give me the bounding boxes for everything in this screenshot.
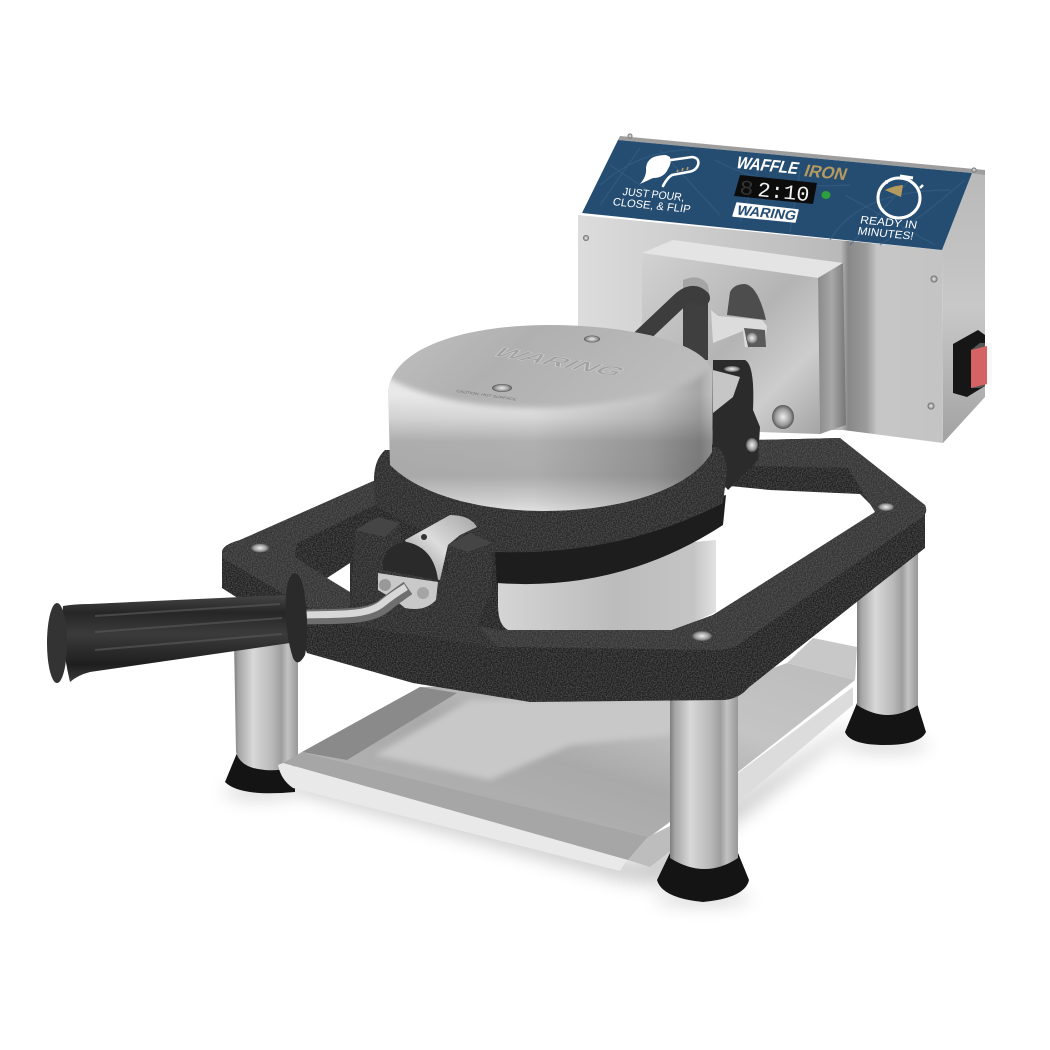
right post cap	[448, 533, 492, 552]
control box front face	[578, 215, 943, 443]
tray back rim	[787, 638, 857, 680]
left leg	[225, 640, 298, 793]
handle	[47, 573, 408, 683]
grip end cap	[47, 603, 67, 683]
tray interior	[302, 663, 855, 838]
rear hinge	[712, 360, 760, 490]
grip	[62, 595, 291, 682]
hinge boss	[350, 517, 505, 650]
frame screws	[251, 503, 894, 641]
tray front lip	[283, 752, 648, 860]
heading: waffle iron	[734, 153, 850, 184]
mount box	[640, 240, 846, 434]
mount box side face	[818, 263, 846, 434]
icon: stopwatch	[878, 176, 923, 218]
power cord	[640, 294, 702, 338]
tray side wall	[738, 687, 853, 802]
handle rod	[305, 587, 408, 617]
frame top surface right and front	[473, 438, 926, 650]
vertical hinge post	[683, 300, 708, 360]
pour caption: CLOSE, & FLIP	[612, 196, 692, 216]
product illustration: waffle iron	[47, 134, 987, 912]
ready caption	[857, 214, 918, 243]
mount box front face	[642, 253, 820, 434]
icon: pour batter into iron	[640, 155, 698, 186]
back right leg	[845, 540, 926, 745]
control box top edge	[618, 136, 985, 175]
digital timer display	[734, 175, 817, 208]
cord clip	[711, 284, 767, 347]
rocker power switch	[953, 330, 992, 397]
frame underside and side	[222, 438, 925, 702]
lower cooking body	[490, 540, 716, 632]
lid body	[380, 320, 720, 515]
control box right side face	[942, 172, 985, 443]
ready caption: READY IN	[859, 214, 918, 232]
status LED	[822, 191, 830, 199]
cast iron base frame	[222, 438, 926, 702]
drip tray	[278, 638, 857, 871]
heading: waffle iron: IRON	[802, 161, 850, 184]
digital timer display: 8	[738, 178, 755, 202]
ground shadows	[222, 720, 929, 904]
silver hinge barrel	[405, 515, 477, 580]
embossed logo: WARING	[485, 346, 632, 379]
lid caution text: CAUTION: HOT SURFACE	[456, 389, 518, 402]
see-through gap	[327, 563, 350, 592]
grip ribs	[95, 604, 282, 650]
lid top surface	[380, 320, 720, 408]
mount bolt	[772, 405, 794, 429]
front leg	[657, 695, 749, 902]
clip recess	[683, 277, 710, 300]
Waring logo: WARING	[735, 202, 799, 223]
tray rear wall	[302, 687, 457, 760]
lid screws	[492, 384, 512, 392]
clamp plate	[378, 573, 438, 609]
lower iron ring	[495, 495, 726, 584]
panel screws	[583, 134, 976, 410]
upper iron ring	[374, 447, 727, 552]
black barrel cap	[383, 542, 438, 580]
control box	[578, 134, 992, 443]
front hinge assembly	[350, 515, 505, 650]
heading: waffle iron: WAFFLE	[734, 153, 802, 178]
pour caption: JUST POUR,	[622, 186, 686, 204]
ready caption: MINUTES!	[857, 225, 915, 243]
tray front white edge	[278, 763, 627, 871]
pour caption	[612, 186, 692, 216]
frame top surface left	[222, 478, 385, 622]
blue label panel	[582, 140, 972, 250]
digital timer display: 2:10	[756, 180, 810, 208]
tray reflection	[375, 700, 690, 780]
mount box top face	[642, 240, 843, 278]
left post cap	[355, 517, 400, 537]
tray corner	[628, 825, 672, 867]
grip flange	[286, 573, 307, 662]
